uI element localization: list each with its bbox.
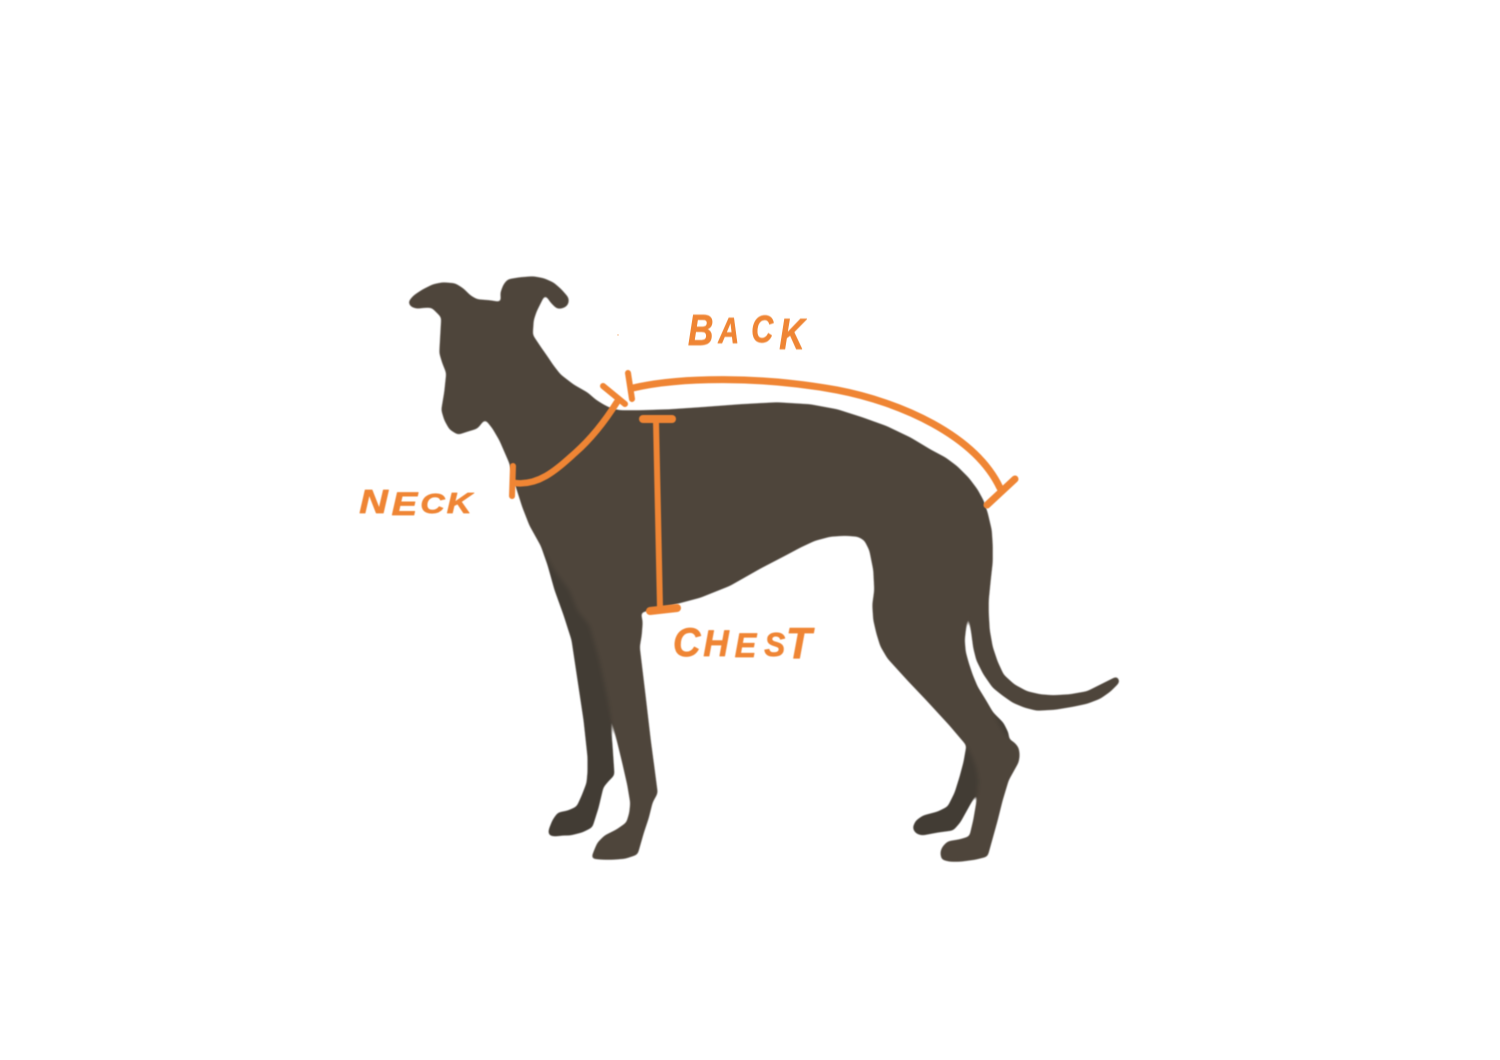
measurement: chest [643,419,677,611]
dog silhouette [409,277,1119,861]
label: back: K [779,310,807,359]
label: neck: K [447,487,475,519]
label: back: C [751,309,774,351]
far hind leg upper bump [977,687,1010,750]
far hind leg [913,740,985,835]
label: chest: C [673,621,701,665]
measurement: back [628,373,1015,505]
measurement: neck [512,386,625,496]
far front leg [541,545,614,836]
label: chest: S [764,626,786,663]
main body [409,277,1119,861]
label: neck: E [392,487,419,522]
label: back: B [688,306,713,355]
label: neck: N [359,483,389,520]
label: chest: T [786,619,815,668]
label: neck: C [420,488,445,519]
label: chest: E [735,627,757,665]
label: back: A [718,310,739,351]
label: chest: H [703,622,730,664]
stray dot [617,334,619,336]
